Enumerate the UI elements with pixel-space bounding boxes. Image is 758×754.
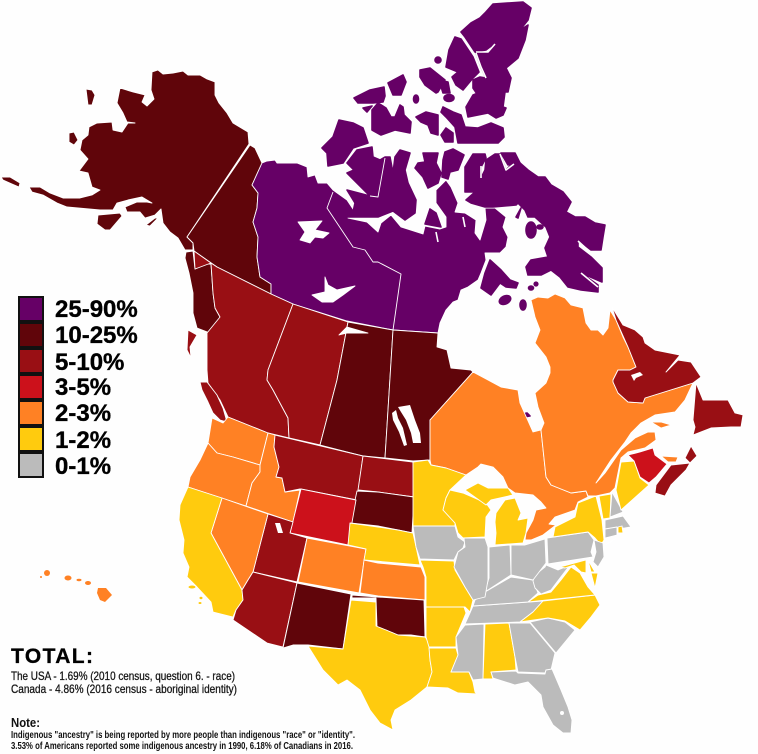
region: Virginia eastern shore <box>591 573 598 588</box>
lake: Smallwood Reservoir <box>631 372 643 381</box>
region: West Virginia <box>533 565 570 594</box>
region: Alaska <box>1 70 249 333</box>
legend item: 5-10%: 5-10% <box>55 349 124 376</box>
region: South Carolina <box>530 618 575 653</box>
lake: Lake Okeechobee <box>560 711 564 715</box>
text: note body: 3.53% of Americans reported some indigenous ancestry in 1990, 6.18% of Canadians in 2016. <box>11 741 353 752</box>
region: Hawaii <box>40 570 112 602</box>
region: Louisiana <box>427 648 477 694</box>
region: Massachusetts <box>605 516 631 529</box>
channels: Baffin inlets and Ellesmere fjords <box>436 44 598 287</box>
region: Florida <box>491 669 572 733</box>
legend item: 1-2%: 1-2% <box>55 427 111 454</box>
region: Quebec <box>531 294 693 496</box>
region: Nevada <box>211 498 268 590</box>
region: Virginia <box>528 567 595 602</box>
legend item: 10-25% <box>19 322 138 349</box>
region: Tennessee <box>465 601 543 624</box>
region: Pennsylvania <box>547 532 594 564</box>
legend item: 2-3%: 2-3% <box>55 400 111 427</box>
region: Delaware <box>588 560 595 572</box>
region: Labrador <box>612 307 701 403</box>
region: New Brunswick <box>628 448 667 483</box>
region: California <box>179 487 243 617</box>
region: Vermont <box>599 494 611 519</box>
text: totals by country: The USA - 1.69% (2010 census, question 6. - race) <box>11 669 235 683</box>
region: Kansas <box>360 560 425 600</box>
legend item: 25-90% <box>19 296 138 323</box>
region: Long Island <box>605 538 616 545</box>
legend item: 10-25%: 10-25% <box>55 322 138 349</box>
region: Nova Scotia <box>655 446 697 496</box>
region: New York <box>553 496 604 545</box>
region: Michigan upper peninsula <box>465 483 513 505</box>
region: Manitoba <box>385 330 473 461</box>
region: Texas <box>308 600 432 730</box>
region: Arkansas <box>426 607 466 647</box>
region: Kentucky <box>473 577 538 606</box>
legend item: 3-5%: 3-5% <box>55 374 111 401</box>
legend item: 25-90%: 25-90% <box>55 296 138 323</box>
lake: Lake Winnipeg <box>392 405 421 446</box>
region: Nebraska <box>348 523 420 565</box>
region: Wyoming <box>290 489 356 545</box>
region: Alberta <box>267 304 348 445</box>
heading: total: TOTAL: <box>11 645 93 668</box>
region: Saskatchewan <box>320 322 393 458</box>
region: Mississippi <box>451 624 484 680</box>
region: Maryland <box>560 560 586 573</box>
region: Ohio <box>511 539 546 580</box>
text: totals by country: Canada - 4.86% (2016 census - aboriginal identity) <box>11 682 237 696</box>
region: Anticosti Island <box>651 422 671 428</box>
region: South Dakota <box>350 491 414 533</box>
region: Oregon <box>188 443 260 506</box>
legend <box>19 296 138 480</box>
region: Rhode Island <box>618 526 623 533</box>
legend item: 0-1%: 0-1% <box>55 453 111 480</box>
boundary: NWT and Nunavut <box>327 192 401 330</box>
region: Iowa <box>413 526 465 560</box>
lake: Lake Athabasca <box>339 327 368 335</box>
boundary: Victoria Island line <box>370 158 385 197</box>
legend item: 1-2% <box>19 427 111 454</box>
region: North Dakota <box>358 456 414 497</box>
text: totals by country <box>11 669 237 696</box>
region: Ontario <box>430 372 588 540</box>
region: Northwest Territories and Nunavut mainland <box>252 160 508 333</box>
region: Colorado <box>298 538 366 593</box>
region: British Columbia <box>187 251 293 438</box>
region: Missouri <box>420 560 473 612</box>
text: note body: Indigenous "ancestry" is being reported by more people than indigenous "race" or "identity". <box>11 730 355 741</box>
legend item: 0-1% <box>19 453 111 480</box>
region: Arizona <box>233 572 297 647</box>
region: New Jersey <box>593 540 604 567</box>
legend item: 5-10% <box>19 349 124 376</box>
region: Newfoundland <box>693 383 743 435</box>
region: Michigan lower peninsula <box>495 498 528 545</box>
region: Alabama <box>483 623 516 679</box>
region: Connecticut <box>605 527 617 538</box>
lake: Great Bear Lake <box>298 221 329 243</box>
region: Arctic islands <box>322 2 605 417</box>
region: North Carolina <box>520 595 600 630</box>
region: Washington <box>208 417 268 465</box>
region: Wisconsin <box>443 490 491 538</box>
lake: Great Salt Lake <box>275 523 283 533</box>
region: New Mexico <box>283 583 351 649</box>
region: Indiana <box>485 545 511 591</box>
region: New Hampshire <box>610 492 623 517</box>
text: note body <box>11 730 355 752</box>
legend item: 3-5% <box>19 374 111 401</box>
region: Idaho <box>246 433 300 522</box>
region: Prince Edward Island <box>661 456 678 462</box>
region: Channel Islands <box>188 586 202 604</box>
lake: Great Slave Lake <box>312 277 355 302</box>
region: Illinois <box>454 538 488 600</box>
region: Utah <box>253 514 307 582</box>
region: Georgia <box>509 623 555 673</box>
heading: note: Note: <box>11 715 40 730</box>
region: Minnesota <box>413 460 466 526</box>
region: Montana <box>274 435 363 500</box>
region: Oklahoma <box>352 595 425 637</box>
legend item: 2-3% <box>19 400 111 427</box>
region: Maine <box>616 461 649 510</box>
region: Yukon <box>187 145 271 294</box>
